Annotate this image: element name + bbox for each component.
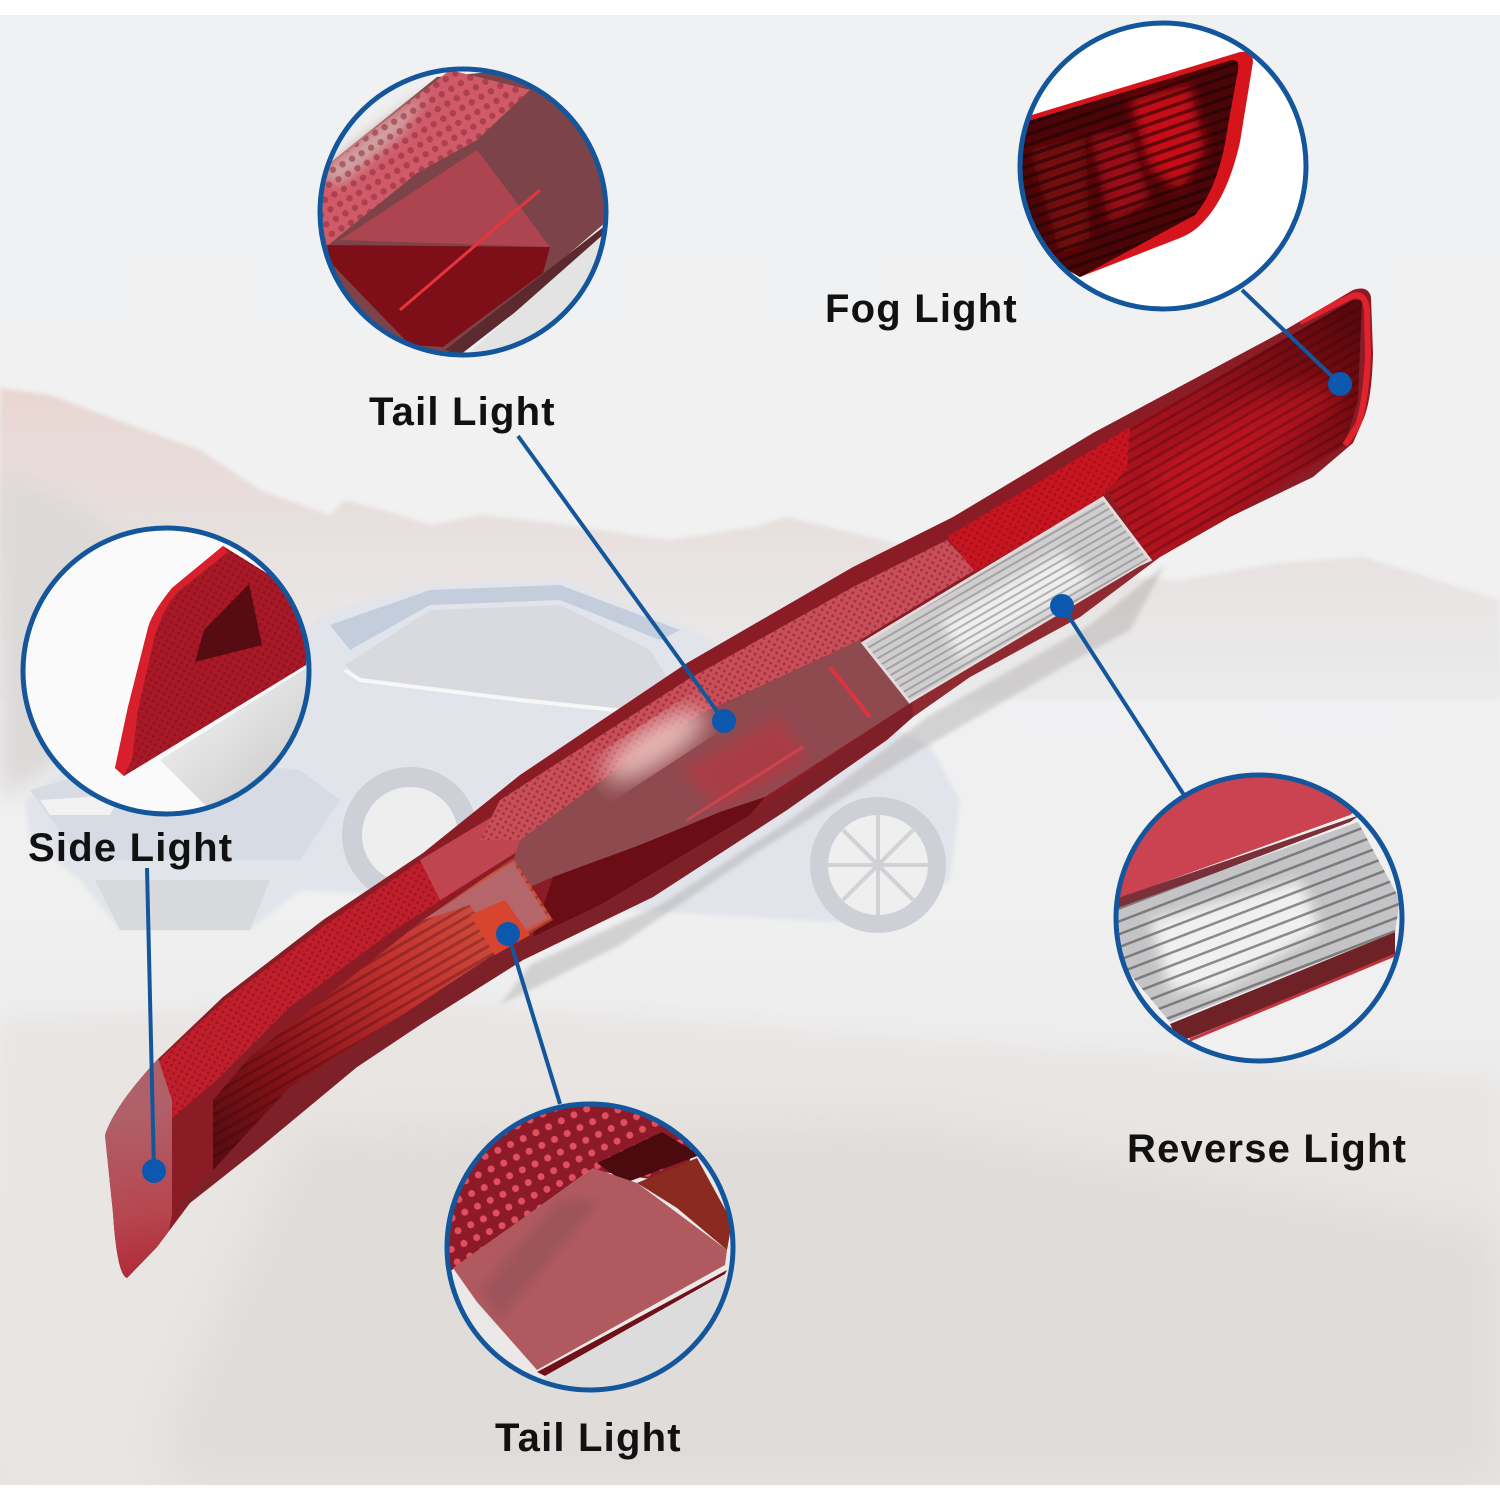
haze section xyxy=(500,640,912,900)
leader lines xyxy=(147,290,1340,1171)
label: Tail Light top: Tail Light xyxy=(369,390,556,434)
mid reflector xyxy=(480,540,975,840)
lower edge band xyxy=(170,695,940,1215)
highlight xyxy=(594,696,716,794)
leader dots xyxy=(142,372,1352,1183)
fog rim xyxy=(1300,295,1368,445)
label: Fog Light: Fog Light xyxy=(825,287,1018,331)
tip xyxy=(105,1058,172,1278)
reverse lens xyxy=(863,498,1150,702)
car xyxy=(25,580,960,933)
detail circle: tail light bottom xyxy=(440,1100,735,1400)
ground xyxy=(0,1000,1500,1485)
detail circle: reverse light xyxy=(1110,770,1410,1061)
dark lower lens xyxy=(530,797,765,945)
lower reflector xyxy=(158,853,515,1118)
fog lens xyxy=(1107,300,1362,560)
shadow under assembly xyxy=(500,565,1165,1005)
label: Reverse Light: Reverse Light xyxy=(1127,1127,1407,1171)
detail circle: fog light xyxy=(1015,23,1306,309)
tail lens xyxy=(213,858,553,1170)
bright reflector xyxy=(947,427,1130,572)
detail circle: side light xyxy=(23,528,320,814)
tail light assembly xyxy=(95,280,1380,1290)
label: Tail Light bottom: Tail Light xyxy=(495,1416,682,1460)
detail circle: tail light top xyxy=(318,66,608,358)
label: Side Light: Side Light xyxy=(28,826,233,870)
mountains xyxy=(0,388,1500,700)
